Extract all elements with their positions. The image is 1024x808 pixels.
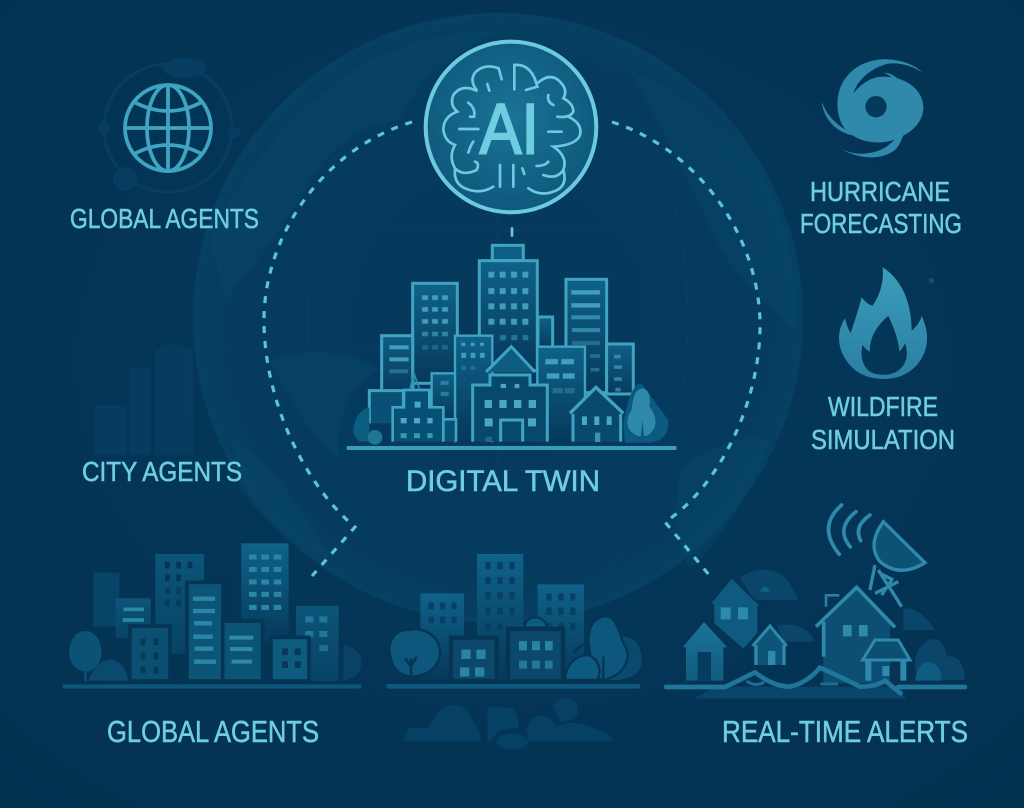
label: hurricane forecasting [800,176,962,239]
AI letters: AI [480,90,539,169]
label: wildfire simulation: SIMULATION [811,424,955,455]
icon: hurricane [822,59,923,157]
stepped front building [393,390,443,442]
icon: AI brain badge [426,42,596,212]
ground line [347,446,677,450]
small porch [863,640,910,660]
bush left [353,407,369,442]
label: global agents top: GLOBAL AGENTS [70,203,259,234]
label: city agents: CITY AGENTS [82,456,242,487]
water wave [693,687,907,698]
icon: globe [98,58,240,192]
front blocks [130,582,309,681]
connector: right dashed arc [612,122,760,576]
connector: left dashed arc [264,122,412,576]
label: hurricane forecasting: HURRICANE [810,176,950,207]
illustration: bottom left city [63,543,362,689]
label: global agents bottom: GLOBAL AGENTS [107,714,319,749]
small house [753,626,787,646]
label: digital twin: DIGITAL TWIN [406,465,600,498]
signal arcs [829,505,870,554]
satellite dish [870,522,925,607]
icon: faded city [95,344,193,455]
illustration: bottom centre city [387,554,642,750]
illustration: digital twin city [347,227,677,450]
faded shrubs [403,698,613,741]
central front building [486,347,535,372]
label: wildfire simulation: WILDFIRE [828,391,938,422]
faint orbit ring [98,58,240,192]
label: wildfire simulation [811,391,955,455]
trees [389,629,440,677]
left house [683,622,727,681]
label: real-time alerts: REAL-TIME ALERTS [722,714,968,749]
tree right [623,383,668,443]
background houses [740,570,798,600]
tree and bush [69,631,102,682]
front blocks [451,629,563,681]
icon: wildfire flame [839,267,934,379]
windows [123,557,328,648]
brain outline [443,65,580,194]
ground line [387,684,640,689]
dome [524,617,547,627]
illustration: bottom right houses with satellite dish [666,505,965,698]
windows [389,275,622,394]
ground line [63,684,361,689]
label: hurricane forecasting: FORECASTING [800,208,962,239]
house right [573,388,621,442]
background globe [193,13,803,623]
large house [823,588,890,683]
